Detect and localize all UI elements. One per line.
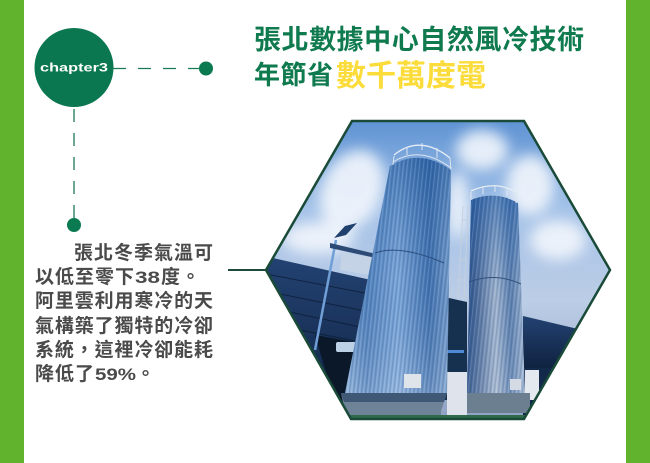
hexagon photo of cooling towers xyxy=(260,115,615,425)
ground strip xyxy=(350,415,525,418)
chapter badge: chapter3 xyxy=(40,60,108,74)
sky with clouds xyxy=(274,122,608,415)
chapter badge xyxy=(34,28,114,107)
title: 數千萬度電 xyxy=(336,60,486,93)
horizontal dashed connector with end dot xyxy=(113,62,213,76)
right green side band xyxy=(626,0,650,463)
body paragraph: 38 xyxy=(135,268,160,287)
body paragraph: 氣構築了獨特的冷卻 xyxy=(35,314,213,337)
body paragraph: 。 xyxy=(136,364,155,385)
body paragraph: 系統，這裡冷卻能耗 xyxy=(35,338,213,361)
ladder xyxy=(458,206,468,300)
left green side band xyxy=(0,0,24,463)
body paragraph xyxy=(35,242,213,385)
title xyxy=(254,25,584,93)
body paragraph: 。 xyxy=(181,267,200,288)
body paragraph: 降低了 xyxy=(35,363,94,385)
body paragraph: 度 xyxy=(161,265,180,288)
connector line to photo xyxy=(228,269,268,271)
vertical dashed connector with end dot xyxy=(67,109,81,232)
body paragraph: 阿里雲利用寒冷的天 xyxy=(35,289,213,312)
body paragraph: 以低至零下 xyxy=(35,266,134,288)
title: 張北數據中心自然風冷技術 xyxy=(254,25,584,55)
title: 年節省 xyxy=(254,60,333,90)
right building xyxy=(444,298,575,415)
lamp post xyxy=(315,223,376,350)
body paragraph: 張北冬季氣溫可 xyxy=(74,242,213,264)
small tank xyxy=(467,185,530,413)
body paragraph: 59% xyxy=(95,365,136,384)
left building xyxy=(268,258,368,403)
large tank xyxy=(341,143,451,421)
